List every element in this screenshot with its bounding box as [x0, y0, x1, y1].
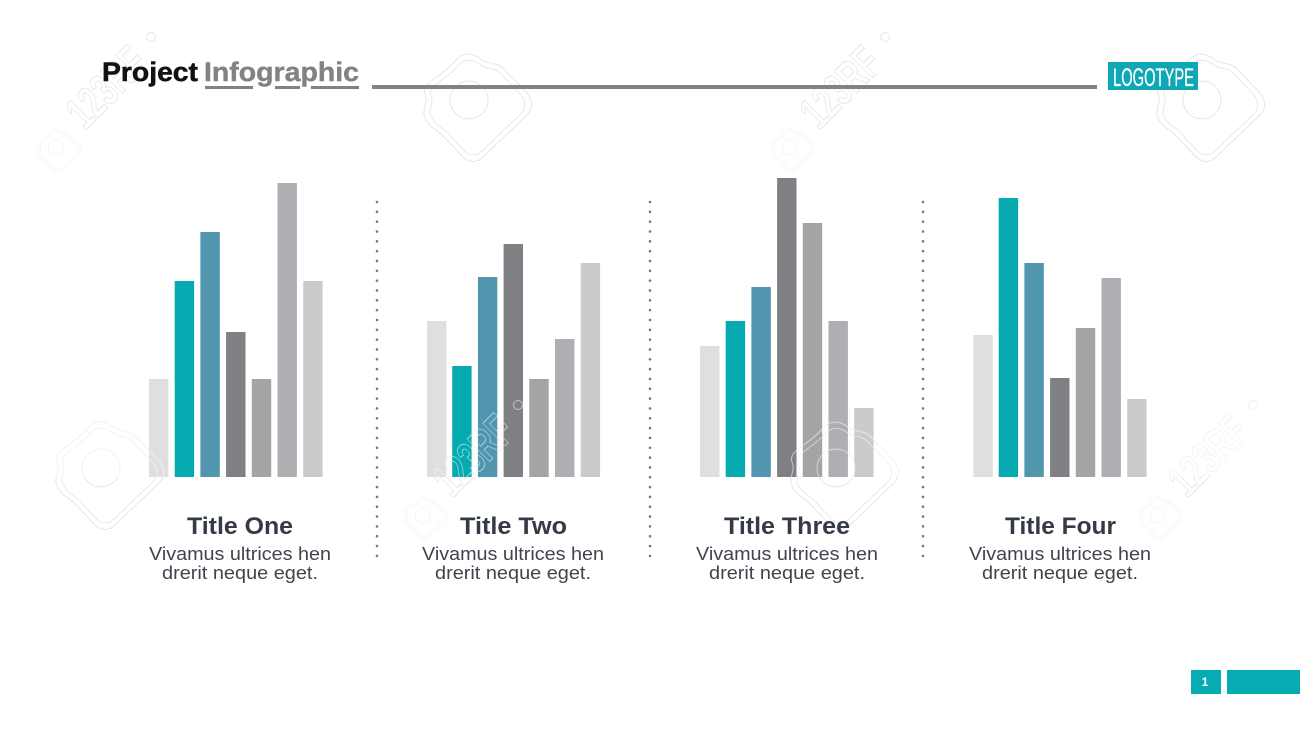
description: drerit neque eget.	[709, 563, 865, 583]
watermark layer	[38, 32, 1265, 540]
header	[102, 57, 1198, 92]
panel: title two	[422, 244, 604, 583]
panel: title three	[696, 178, 878, 583]
heading: Title Four	[1005, 513, 1116, 540]
footer bar	[1227, 670, 1300, 694]
panel: title four	[969, 198, 1151, 583]
page number: 1	[1202, 675, 1209, 689]
description: Vivamus ultrices hen	[969, 544, 1151, 564]
panel: title one	[149, 183, 331, 583]
title: Infographic	[204, 57, 359, 87]
bar chart two	[427, 244, 600, 477]
description	[696, 544, 878, 583]
bar chart four	[973, 198, 1147, 477]
bar chart one	[149, 183, 323, 477]
title	[102, 57, 359, 89]
header rule	[372, 85, 1097, 89]
logotype: LOGOTYPE	[1113, 64, 1194, 92]
description: drerit neque eget.	[435, 563, 591, 583]
description: Vivamus ultrices hen	[149, 544, 331, 564]
description: Vivamus ultrices hen	[696, 544, 878, 564]
heading: Title Three	[724, 513, 850, 540]
heading: Title One	[187, 513, 293, 540]
description: Vivamus ultrices hen	[422, 544, 604, 564]
description	[149, 544, 331, 583]
description	[969, 544, 1151, 583]
page number	[1191, 670, 1221, 694]
description: drerit neque eget.	[162, 563, 318, 583]
title: Project	[102, 57, 198, 87]
heading: Title Two	[460, 513, 567, 540]
description: drerit neque eget.	[982, 563, 1138, 583]
logotype	[1108, 62, 1198, 92]
description	[422, 544, 604, 583]
bar chart three	[700, 178, 874, 477]
